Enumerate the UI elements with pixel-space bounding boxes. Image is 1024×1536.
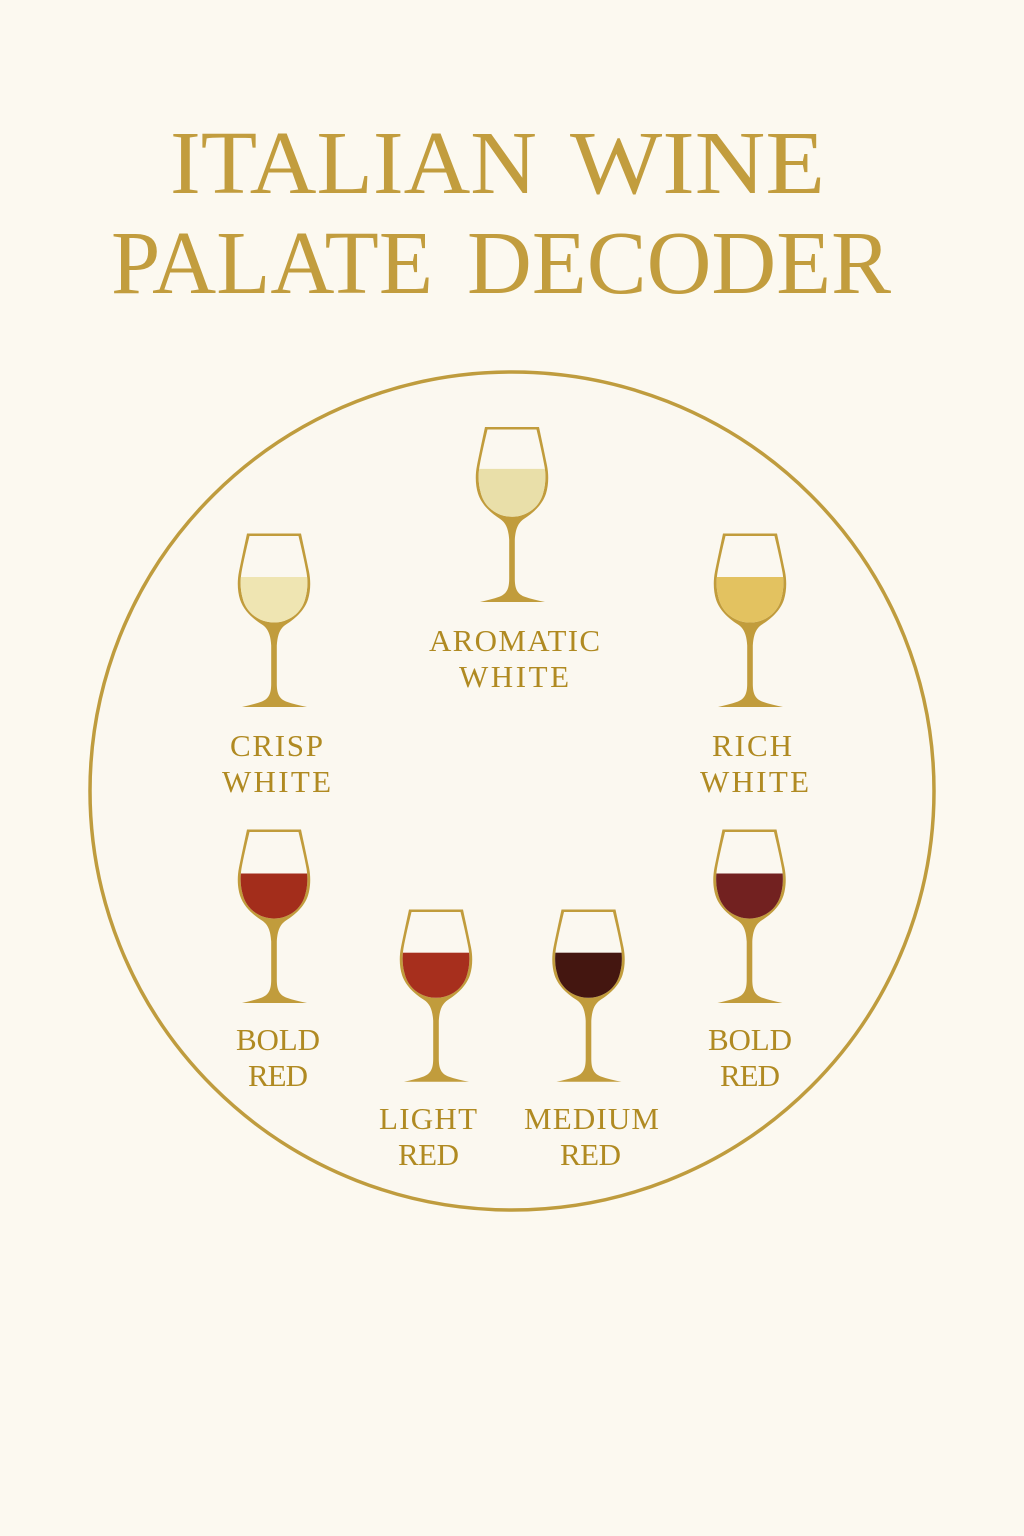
glass: crisp white [238, 534, 310, 707]
label: crisp white: WHITE [222, 764, 331, 799]
label: bold red right: BOLD [708, 1022, 792, 1057]
label: rich white [700, 728, 809, 799]
panel: palate circle [90, 372, 934, 1210]
label: aromatic white [429, 623, 600, 694]
label: light red: RED [398, 1137, 459, 1172]
glass: aromatic white [476, 427, 548, 602]
label: rich white: WHITE [700, 764, 809, 799]
label: medium red: MEDIUM [524, 1101, 659, 1136]
label: aromatic white: WHITE [459, 659, 569, 694]
glass: light red [400, 910, 472, 1082]
label: medium red [524, 1101, 659, 1172]
glass: bold red left [238, 830, 310, 1003]
label: light red [379, 1101, 477, 1172]
label: rich white: RICH [712, 728, 792, 763]
label: light red: LIGHT [379, 1101, 477, 1136]
label: bold red left: RED [248, 1058, 308, 1093]
label: bold red right: RED [720, 1058, 780, 1093]
title: WINE [570, 114, 825, 213]
label: bold red left [236, 1022, 320, 1093]
label: crisp white [222, 728, 331, 799]
label: aromatic white: AROMATIC [429, 623, 600, 658]
title: PALATE [111, 214, 433, 313]
title: DECODER [467, 214, 891, 313]
label: medium red: RED [560, 1137, 621, 1172]
label: crisp white: CRISP [230, 728, 323, 763]
label: bold red left: BOLD [236, 1022, 320, 1057]
title [111, 114, 891, 313]
label: bold red right [708, 1022, 792, 1093]
glass: rich white [714, 534, 786, 707]
glass: bold red right [713, 830, 786, 1003]
glass: medium red [552, 910, 625, 1082]
title: ITALIAN [170, 114, 537, 213]
